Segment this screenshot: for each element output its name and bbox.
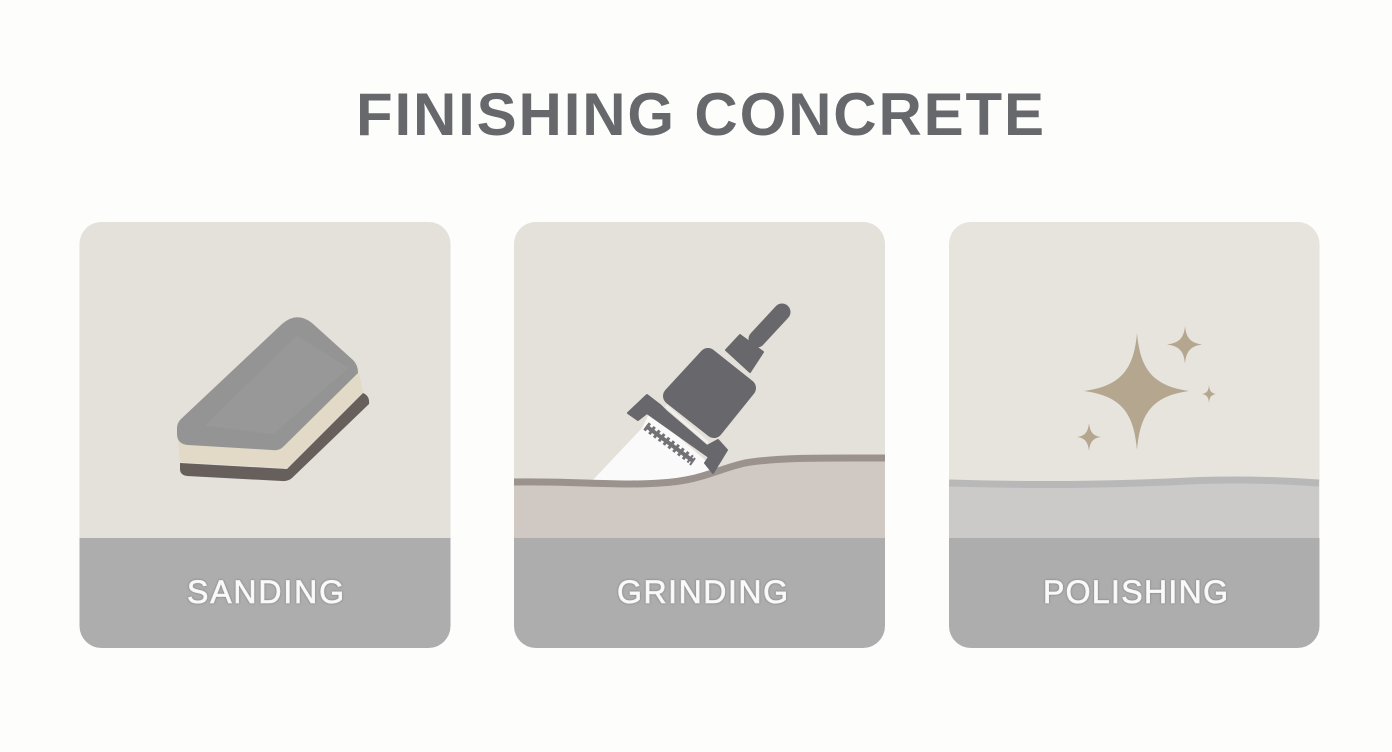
icon: sparkles (1077, 326, 1216, 451)
label: sanding: SANDING (187, 574, 344, 610)
icon: grinder (628, 312, 782, 473)
band: polishing label background (949, 538, 1320, 648)
ground: smooth surface (949, 480, 1319, 538)
ground: uneven surface (514, 458, 885, 538)
panel: polishing (949, 222, 1320, 648)
label: polishing: POLISHING (1043, 574, 1228, 610)
panel: sanding (80, 222, 450, 648)
icon: sanding block (177, 317, 369, 481)
panel: grinding (514, 222, 885, 648)
title: FINISHING CONCRETE (356, 81, 1044, 148)
band: grinding label background (514, 538, 885, 648)
band: sanding label background (80, 538, 450, 648)
light beam from grinder (593, 416, 710, 480)
label: grinding: GRINDING (617, 574, 788, 610)
